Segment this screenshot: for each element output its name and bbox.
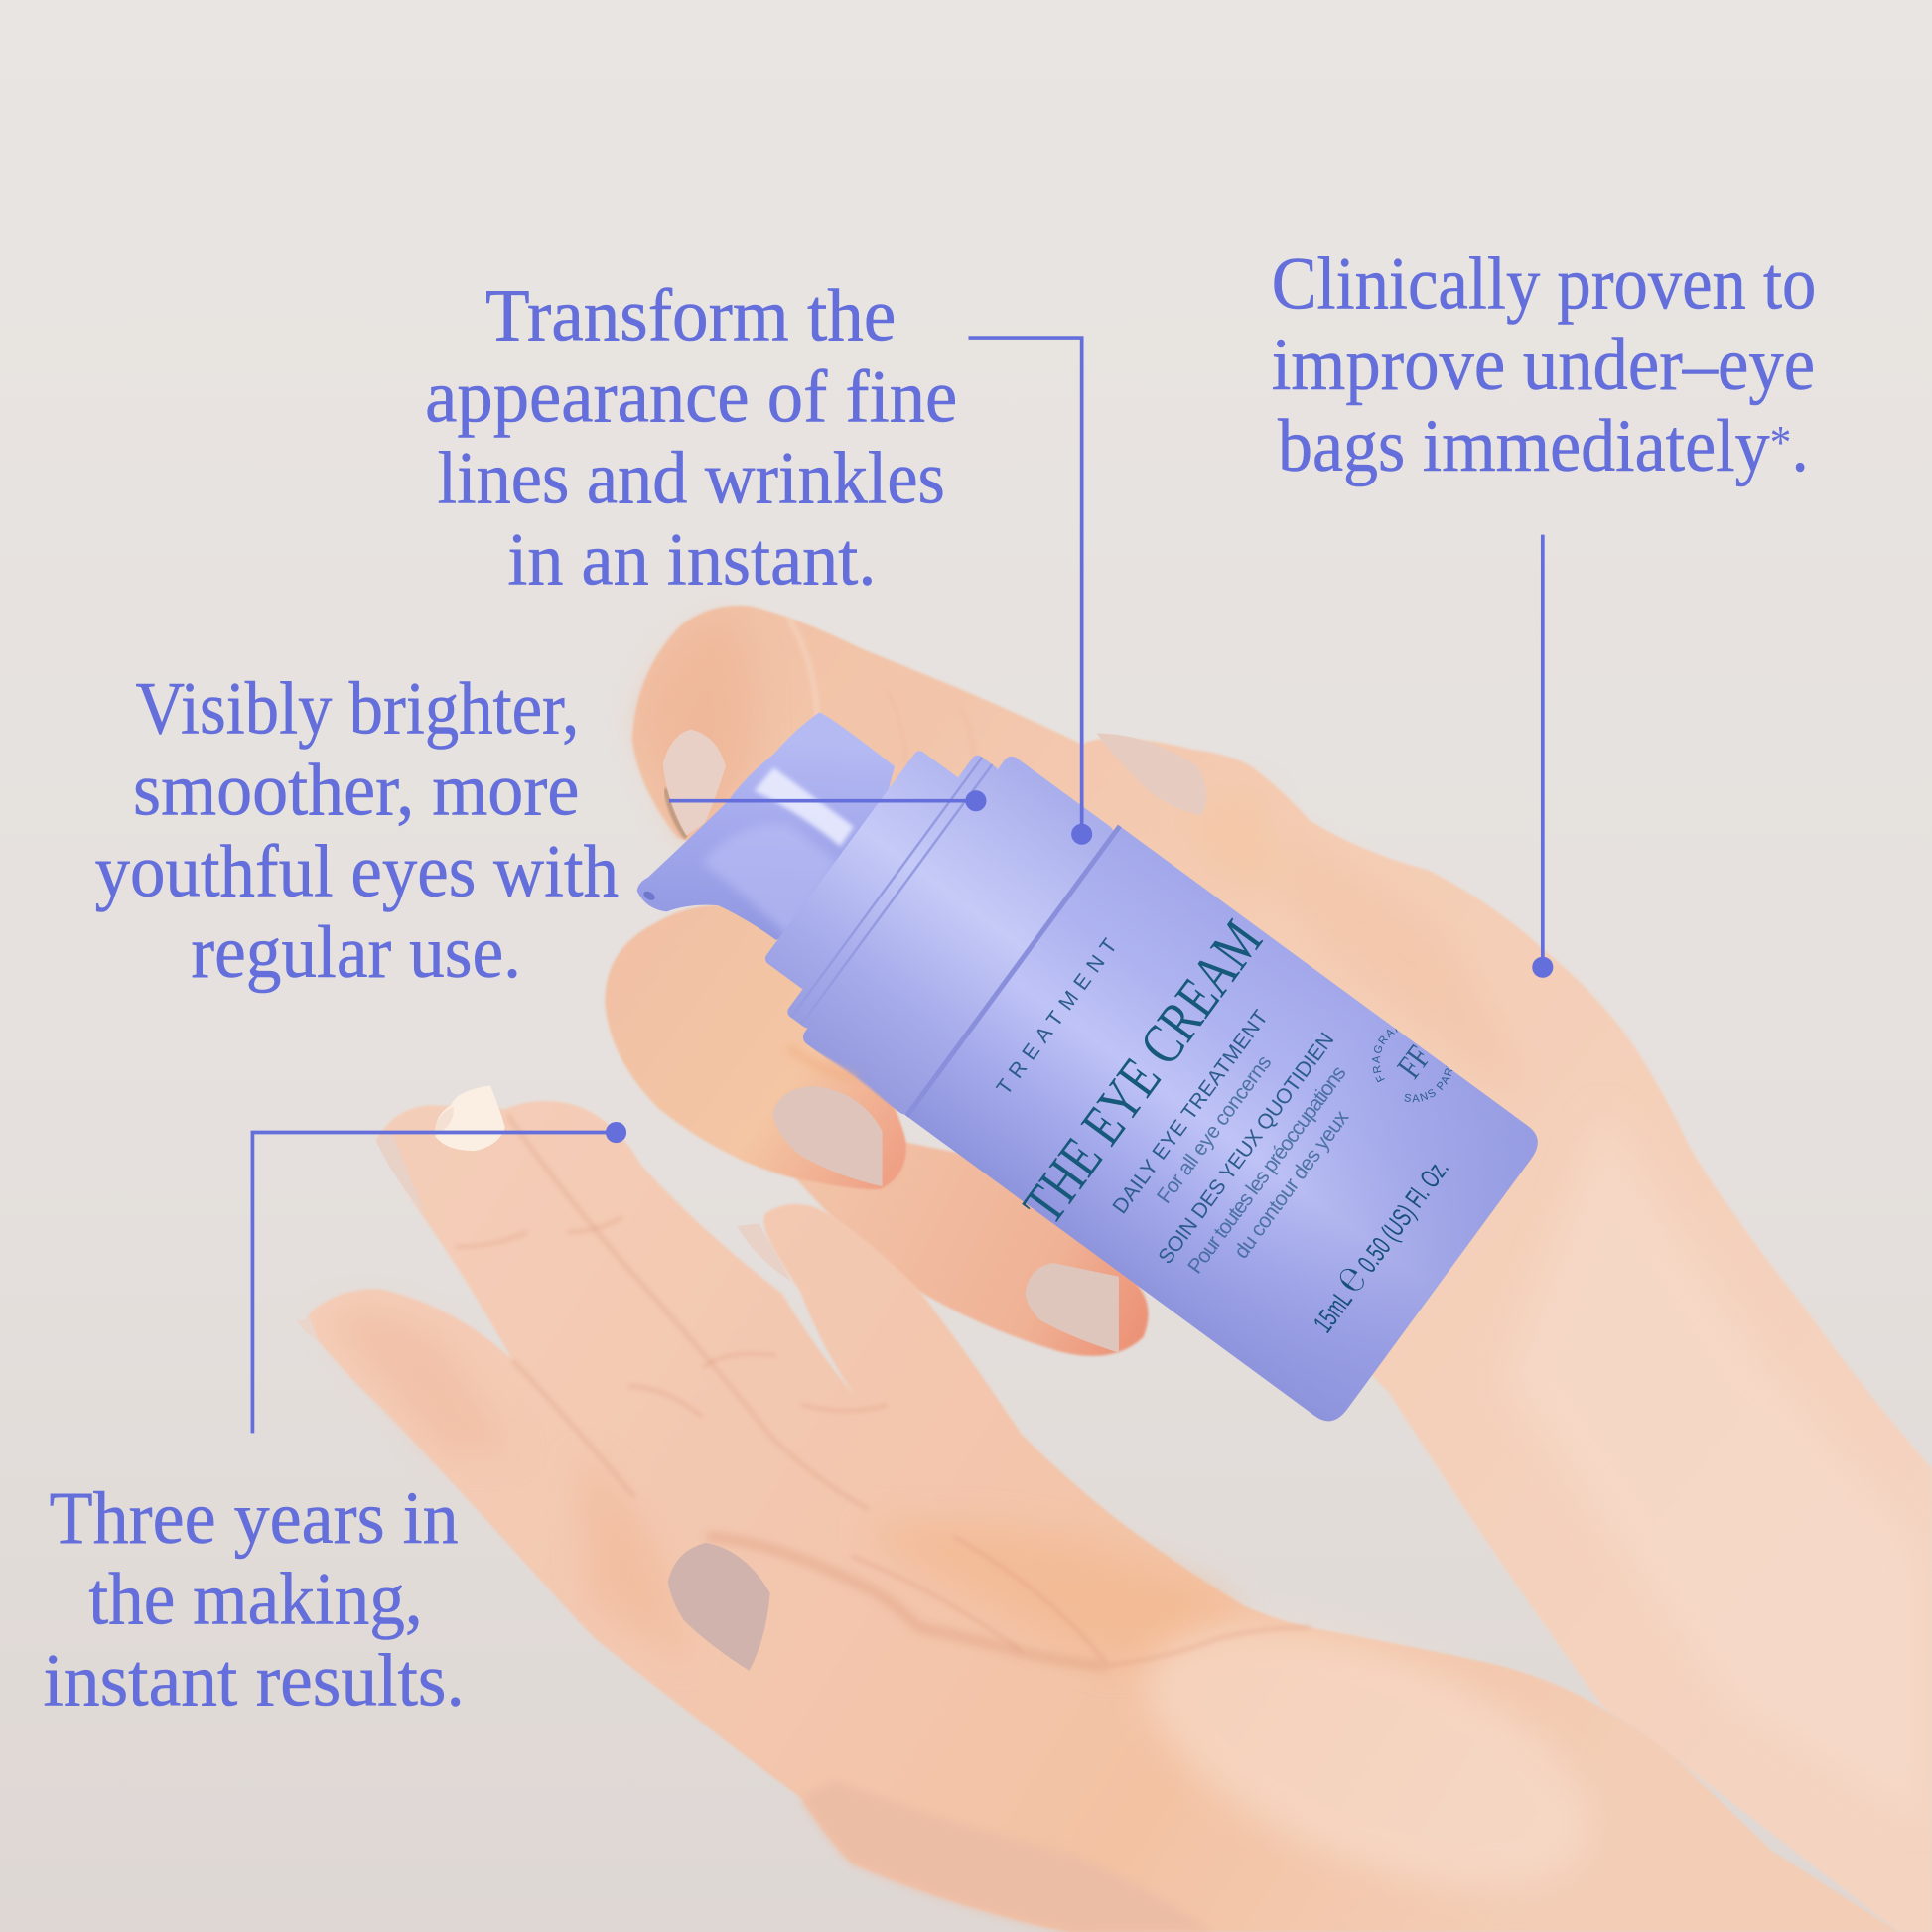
bottle (637, 713, 1538, 1422)
label: for all eye concerns: For all eye concerns (1153, 1051, 1276, 1208)
callout text: the making, (88, 1559, 423, 1641)
leader line (669, 790, 986, 811)
bottom edge shading (801, 1780, 1213, 1932)
fragrance free seal: SANS PARFUM (1404, 1066, 1453, 1102)
hand shading (1282, 838, 1522, 1097)
callout text: . (1791, 405, 1809, 487)
fingernail: thumb (668, 1543, 770, 1671)
middle finger behind bottle (605, 905, 906, 1189)
callout text: improve under–eye (1272, 324, 1815, 406)
label: daily eye treatment: DAILY EYE TREATMENT (1108, 1006, 1273, 1218)
callout: visibly brighter (95, 667, 986, 994)
fragrance free seal: FRAGRANCE (1372, 1029, 1398, 1082)
callout: three years (43, 1122, 626, 1723)
leader line (252, 1122, 626, 1433)
callout text: Three years in (50, 1477, 459, 1560)
callout text: * (1770, 418, 1791, 470)
callout text: Clinically proven to (1272, 242, 1816, 325)
finger joint crease (788, 619, 818, 746)
callout text (95, 667, 619, 994)
label: volume: 15mL ℮ 0.50 (US) Fl. Oz. (1299, 1147, 1457, 1340)
small finger tips (376, 1131, 425, 1213)
label: soin des yeux quotidien: SOIN DES YEUX QUOTIDIEN (1154, 1029, 1338, 1269)
callout text: instant results. (43, 1640, 465, 1723)
fingernail: index finger (663, 730, 726, 838)
label: pour toutes les préoccupations: Pour toutes les préoccupations (1183, 1062, 1351, 1278)
callout text (43, 1477, 465, 1723)
palm warm shading (863, 1523, 1232, 1663)
fragrance free seal (1372, 1029, 1453, 1102)
fragrance free seal: FF (1390, 1038, 1439, 1085)
leader line (1532, 535, 1553, 978)
heel of hand highlight (1111, 1571, 1624, 1932)
fingernail: back finger (1097, 733, 1206, 816)
callout text: Transform the (485, 275, 896, 357)
callout text (425, 275, 957, 601)
palm creases (456, 1217, 1311, 1666)
bottle body (904, 825, 1546, 1429)
bottle cap collar (800, 753, 1117, 1118)
neck with ridges (746, 724, 1000, 1031)
middle finger tip over bottle (690, 1042, 904, 1189)
warm finger base near nail (1182, 788, 1282, 888)
thumb over palm (706, 1537, 1106, 1667)
ring finger under bottle (788, 1134, 1149, 1356)
fingernail: ring finger (1026, 1263, 1119, 1353)
gloss highlight (755, 767, 854, 847)
callout: transform fine lines (425, 275, 1092, 845)
callout text: appearance of fine (425, 355, 957, 438)
label: du contour des yeux: du contour des yeux (1230, 1106, 1353, 1263)
photo: hand holding bottle, back layer (605, 606, 1932, 1932)
callout text: smoother, more (133, 749, 579, 831)
callout text: in an instant. (507, 518, 876, 601)
label: product name: THE EYE CREAM (1010, 908, 1275, 1235)
fingernail: middle finger (772, 1086, 883, 1186)
callout text (1272, 242, 1816, 487)
callout text: youthful eyes with (95, 830, 619, 912)
finger separation shadows (507, 1115, 869, 1509)
lower open hand (297, 1085, 1898, 1932)
callout: clinically proven (1272, 242, 1816, 978)
leader line (968, 338, 1092, 845)
label: treatment: TREATMENT (993, 934, 1122, 1099)
pump head and spout (637, 712, 895, 940)
hand and forearm behind bottle (632, 606, 1932, 1932)
fingertip warm shading (327, 1311, 517, 1453)
callout text: Visibly brighter, (136, 667, 579, 750)
cream dollop (435, 1085, 505, 1151)
callout text: regular use. (191, 911, 521, 994)
callout text: bags immediately (1278, 405, 1810, 487)
callout text: lines and wrinkles (438, 437, 945, 519)
